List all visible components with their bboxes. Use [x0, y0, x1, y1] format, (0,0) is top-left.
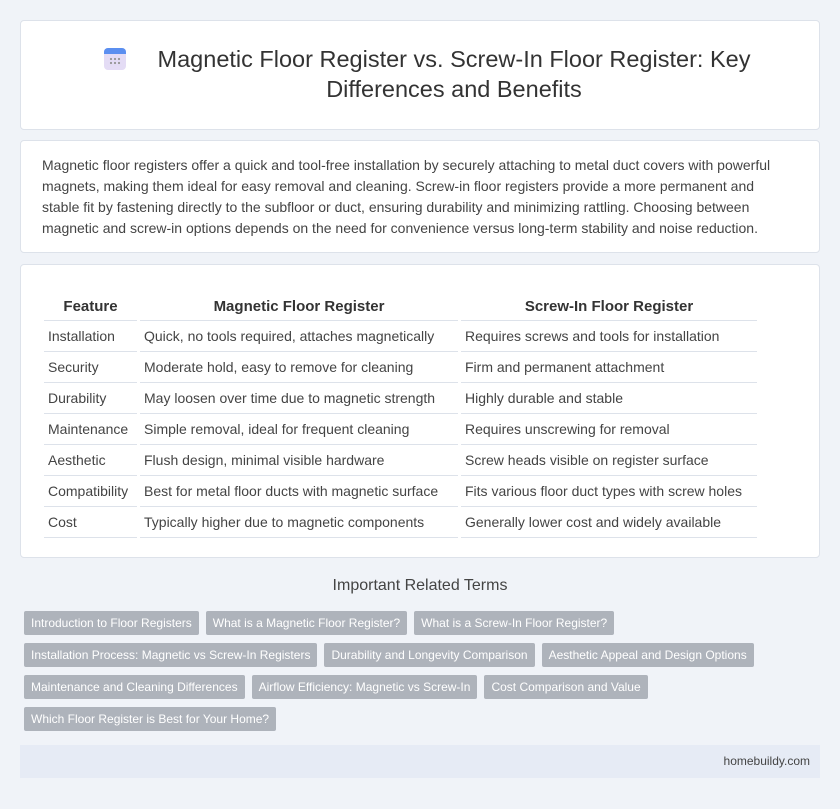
- panel: comparison table: Quick, no tools required, attaches magnetically: [144, 328, 434, 344]
- panel: comparison table: Feature: [63, 298, 118, 315]
- tags: Durability and Longevity Comparison: [331, 648, 528, 662]
- panel: comparison table: Highly durable and stable: [465, 390, 623, 406]
- panel: comparison table: Screw heads visible on register surface: [465, 452, 709, 468]
- panel: comparison table: May loosen over time due to magnetic strength: [144, 390, 435, 406]
- panel: comparison table: Best for metal floor ducts with magnetic surface: [144, 483, 438, 499]
- tags: Airflow Efficiency: Magnetic vs Screw-In: [259, 680, 470, 694]
- tags: What is a Magnetic Floor Register?: [213, 616, 400, 630]
- related terms heading: Important Related Terms: [333, 577, 507, 594]
- tags: Introduction to Floor Registers: [31, 616, 192, 630]
- intro text: [20, 140, 820, 253]
- tags: Aesthetic Appeal and Design Options: [549, 648, 747, 662]
- panel: comparison table: Moderate hold, easy to remove for cleaning: [144, 359, 413, 375]
- panel: comparison table: Aesthetic: [48, 452, 106, 468]
- title: Magnetic Floor Register vs. Screw-In Floor Register: Key Differences and Benefits: [158, 46, 750, 102]
- header card: [20, 20, 820, 130]
- intro text: Magnetic floor registers offer a quick and tool-free installation by securely attaching to metal duct covers with powerful: [42, 157, 770, 173]
- panel: comparison table: Security: [48, 359, 99, 375]
- intro text: magnetic and screw-in options depends on the need for convenience versus long-term stability and noise reduction.: [42, 220, 758, 236]
- footer: [20, 745, 820, 778]
- tags: Maintenance and Cleaning Differences: [31, 680, 238, 694]
- panel: comparison table: Installation: [48, 328, 115, 344]
- tags: What is a Screw-In Floor Register?: [421, 616, 607, 630]
- panel: comparison table: Firm and permanent attachment: [465, 359, 664, 375]
- panel: comparison table: Screw-In Floor Register: [525, 298, 693, 315]
- panel: comparison table: Requires unscrewing for removal: [465, 421, 670, 437]
- panel: comparison table: Maintenance: [48, 421, 128, 437]
- icon: calendar: [104, 48, 126, 70]
- panel: comparison table: Generally lower cost and widely available: [465, 514, 721, 530]
- tags: Which Floor Register is Best for Your Home?: [31, 712, 269, 726]
- tags: Installation Process: Magnetic vs Screw-In Registers: [31, 648, 310, 662]
- footer: homebuildy.com: [724, 754, 810, 768]
- tags: [24, 611, 754, 731]
- intro text: magnets, making them ideal for easy removal and cleaning. Screw-in floor registers provide a more permanent and: [42, 178, 754, 194]
- panel: comparison table: Simple removal, ideal for frequent cleaning: [144, 421, 409, 437]
- panel: comparison table: Requires screws and tools for installation: [465, 328, 719, 344]
- tags: Cost Comparison and Value: [491, 680, 641, 694]
- panel: comparison table: Cost: [48, 514, 77, 530]
- panel: comparison table: Fits various floor duct types with screw holes: [465, 483, 742, 499]
- panel: comparison table: [20, 264, 820, 558]
- panel: comparison table: Durability: [48, 390, 106, 406]
- intro text: stable fit by fastening directly to the subfloor or duct, ensuring durability and minimizing rattling. Choosing between: [42, 199, 749, 215]
- panel: comparison table: Compatibility: [48, 483, 128, 499]
- panel: comparison table: Typically higher due to magnetic components: [144, 514, 424, 530]
- panel: comparison table: Magnetic Floor Register: [214, 298, 384, 315]
- panel: comparison table: Flush design, minimal visible hardware: [144, 452, 384, 468]
